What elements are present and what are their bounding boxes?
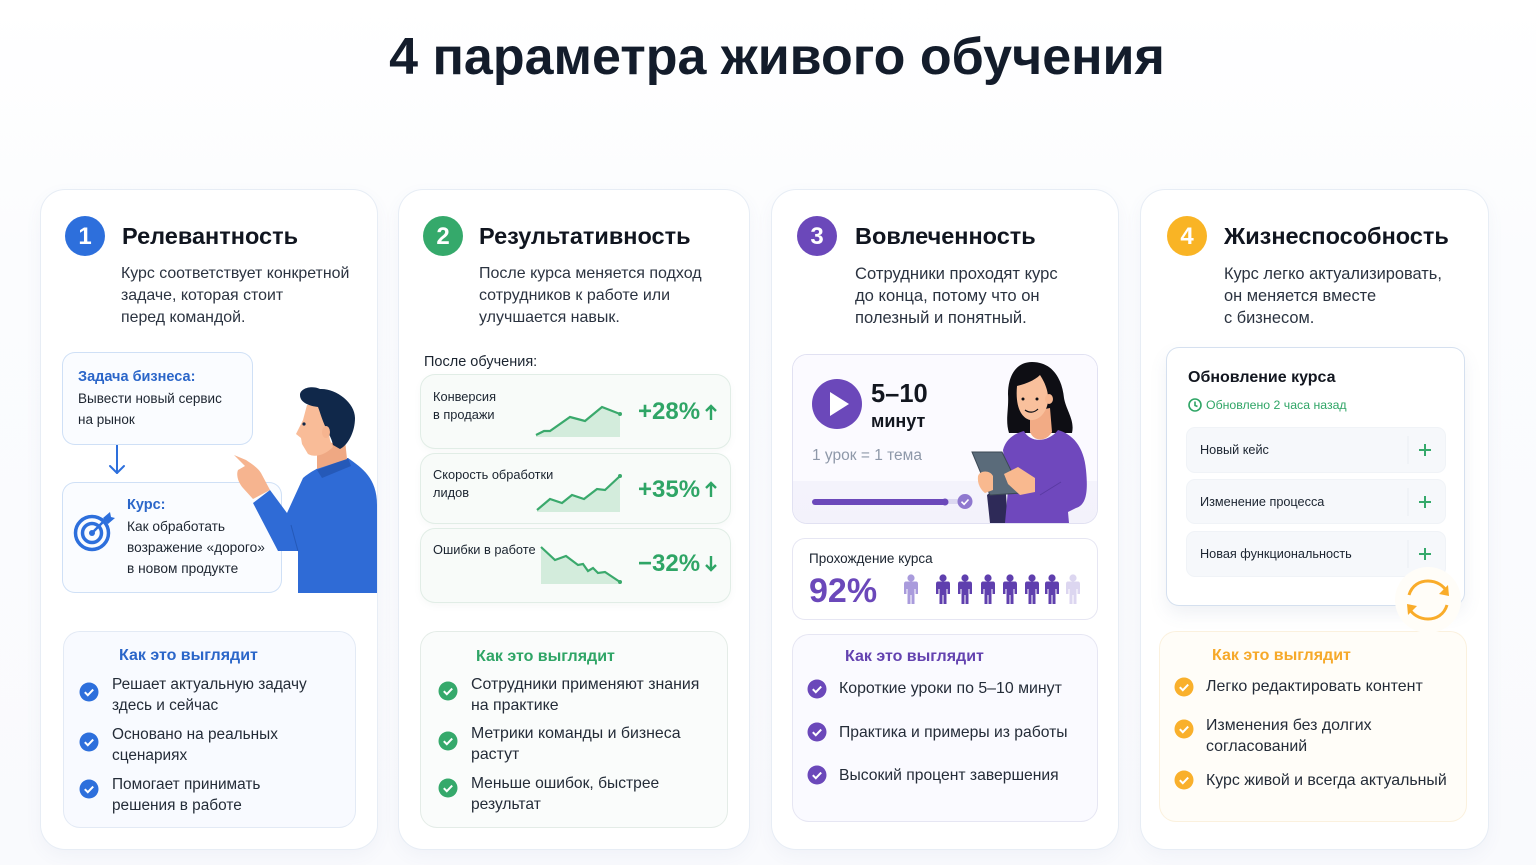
description: с бизнесом. bbox=[1224, 309, 1314, 327]
check icon bbox=[808, 766, 826, 784]
task label: Задача бизнеса: bbox=[78, 369, 195, 385]
icon: sync bbox=[1395, 567, 1461, 633]
metric label: Ошибки в работе bbox=[433, 542, 536, 557]
update title: Обновление курса bbox=[1188, 369, 1336, 386]
list item bbox=[1206, 715, 1372, 757]
progress bar bbox=[812, 494, 972, 509]
list item: согласований bbox=[1206, 738, 1307, 755]
list item: Меньше ошибок, быстрее bbox=[471, 775, 659, 792]
panel heading: Как это выглядит bbox=[119, 647, 258, 664]
panel: card 3 engagement bbox=[772, 190, 1118, 849]
arrow up bbox=[705, 404, 717, 420]
metric: lead speed bbox=[421, 454, 730, 523]
plus icon bbox=[1408, 540, 1431, 568]
description bbox=[121, 265, 349, 326]
list item: Короткие уроки по 5–10 минут bbox=[839, 680, 1062, 697]
row text: Новая функциональность bbox=[1200, 547, 1352, 561]
check icon bbox=[80, 732, 98, 752]
description: полезный и понятный. bbox=[855, 308, 1027, 327]
completion box bbox=[793, 539, 1097, 619]
icon: target bbox=[74, 512, 115, 552]
task text: Вывести новый сервис bbox=[78, 391, 222, 406]
list item: Метрики команды и бизнеса bbox=[471, 725, 681, 742]
panel: how it looks 1 bbox=[64, 632, 355, 827]
list item: Сотрудники применяют знания bbox=[471, 676, 699, 693]
check icon bbox=[80, 682, 98, 702]
check icon bbox=[1174, 677, 1194, 697]
list item bbox=[112, 676, 307, 714]
row: process change bbox=[1187, 480, 1445, 523]
video lesson box bbox=[793, 355, 1097, 523]
row text: Изменение процесса bbox=[1200, 495, 1324, 509]
description: до конца, потому что он bbox=[855, 286, 1040, 305]
course text bbox=[127, 519, 265, 576]
arrow down bbox=[705, 556, 717, 572]
badge 4 bbox=[1167, 216, 1207, 256]
list item: Курс живой и всегда актуальный bbox=[1206, 772, 1447, 789]
list item: Помогает принимать bbox=[112, 776, 260, 793]
description: перед командой. bbox=[121, 309, 245, 326]
course label: Курс: bbox=[127, 497, 165, 513]
check icon bbox=[808, 680, 826, 698]
badge 3: 3 bbox=[810, 223, 824, 250]
metrics label: После обучения: bbox=[424, 354, 537, 370]
task box bbox=[63, 353, 252, 444]
check icon bbox=[1174, 770, 1194, 790]
metric: conversion bbox=[421, 375, 730, 448]
line chart bbox=[540, 546, 622, 584]
plus icon bbox=[1408, 436, 1431, 464]
metric label: лидов bbox=[433, 485, 469, 500]
list item: результат bbox=[471, 796, 541, 813]
panel: card 4 viability bbox=[1141, 190, 1488, 849]
row: new functionality bbox=[1187, 532, 1445, 576]
panel heading: Как это выглядит bbox=[845, 648, 984, 665]
list item: сценариях bbox=[112, 747, 187, 764]
metric label: Скорость обработки bbox=[433, 467, 553, 482]
badge 2: 2 bbox=[436, 223, 450, 250]
lesson note: 1 урок = 1 тема bbox=[812, 447, 922, 464]
list item bbox=[112, 776, 260, 814]
description bbox=[1224, 265, 1442, 327]
list item: решения в работе bbox=[112, 797, 242, 814]
description bbox=[855, 264, 1058, 327]
plus icon bbox=[1408, 488, 1431, 516]
description: улучшается навык. bbox=[479, 309, 620, 326]
list item: Решает актуальную задачу bbox=[112, 676, 307, 693]
course text: возражение «дорого» bbox=[127, 540, 265, 555]
metric value: −32% bbox=[638, 550, 700, 577]
panel: how it looks 2 bbox=[421, 632, 727, 827]
duration unit: минут bbox=[871, 411, 925, 431]
metric label bbox=[433, 467, 553, 500]
check icon bbox=[438, 732, 458, 750]
metric label bbox=[433, 389, 496, 422]
panel heading: Как это выглядит bbox=[1212, 647, 1351, 664]
metric label: Конверсия bbox=[433, 389, 496, 404]
list item: здесь и сейчас bbox=[112, 697, 218, 714]
course text: в новом продукте bbox=[127, 561, 238, 576]
description: он меняется вместе bbox=[1224, 287, 1376, 305]
description: После курса меняется подход bbox=[479, 265, 702, 282]
description: Курс легко актуализировать, bbox=[1224, 265, 1442, 283]
duration: 5–10 bbox=[871, 380, 928, 408]
list item bbox=[112, 726, 278, 764]
icon: clock bbox=[1188, 398, 1202, 412]
description bbox=[479, 265, 702, 326]
task text: на рынок bbox=[78, 412, 135, 427]
completion value: 92% bbox=[809, 572, 877, 610]
list item: Практика и примеры из работы bbox=[839, 724, 1068, 741]
panel: card 1 relevance bbox=[41, 190, 377, 849]
row text: Новый кейс bbox=[1200, 443, 1269, 457]
heading: engagement: Вовлеченность bbox=[855, 223, 1036, 249]
check icon bbox=[1174, 719, 1194, 739]
title: 4 параметра живого обучения bbox=[389, 28, 1165, 86]
list item: Изменения без долгих bbox=[1206, 717, 1372, 734]
line chart bbox=[536, 406, 622, 437]
heading: effectiveness: Результативность bbox=[479, 223, 691, 249]
badge 4: 4 bbox=[1180, 223, 1194, 250]
check icon bbox=[438, 778, 458, 798]
panel heading: Как это выглядит bbox=[476, 648, 615, 665]
heading: viability: Жизнеспособность bbox=[1224, 223, 1449, 249]
update time: Обновлено 2 часа назад bbox=[1206, 398, 1347, 412]
metric value: +28% bbox=[638, 398, 700, 425]
metric value: +35% bbox=[638, 476, 700, 503]
metric: errors bbox=[421, 529, 730, 602]
badge 3 bbox=[797, 216, 837, 256]
description: Сотрудники проходят курс bbox=[855, 264, 1058, 283]
list item bbox=[471, 725, 681, 763]
arrow: task to course bbox=[109, 445, 125, 474]
line chart bbox=[536, 474, 622, 512]
panel: how it looks 3 bbox=[793, 635, 1097, 821]
description: сотрудников к работе или bbox=[479, 287, 670, 304]
badge 2 bbox=[423, 216, 463, 256]
list item: Основано на реальных bbox=[112, 726, 278, 743]
course box bbox=[63, 483, 281, 592]
illustration: woman with tablet bbox=[971, 362, 1087, 523]
check icon bbox=[438, 682, 458, 700]
check icon bbox=[80, 780, 98, 798]
people icons bbox=[904, 574, 1080, 604]
list item: Легко редактировать контент bbox=[1206, 678, 1423, 695]
metric label: в продажи bbox=[433, 407, 495, 422]
list item bbox=[471, 775, 659, 813]
icon: play bbox=[812, 379, 862, 429]
list item: Высокий процент завершения bbox=[839, 767, 1059, 784]
completion label: Прохождение курса bbox=[809, 551, 933, 566]
panel: how it looks 4 bbox=[1160, 632, 1466, 821]
description: задаче, которая стоит bbox=[121, 287, 283, 304]
row: new case bbox=[1187, 428, 1445, 472]
list item: растут bbox=[471, 746, 519, 763]
panel: card 2 effectiveness bbox=[399, 190, 749, 849]
description: Курс соответствует конкретной bbox=[121, 265, 349, 282]
badge 1: 1 bbox=[78, 223, 92, 250]
course update box bbox=[1167, 348, 1464, 605]
check icon bbox=[808, 722, 826, 742]
list item: на практике bbox=[471, 697, 559, 714]
heading: relevance: Релевантность bbox=[122, 223, 298, 249]
illustration: man pointing bbox=[234, 387, 377, 593]
course text: Как обработать bbox=[127, 519, 225, 534]
badge 1 bbox=[65, 216, 105, 256]
arrow up bbox=[705, 481, 717, 497]
list item bbox=[471, 676, 699, 714]
task text bbox=[78, 391, 222, 427]
